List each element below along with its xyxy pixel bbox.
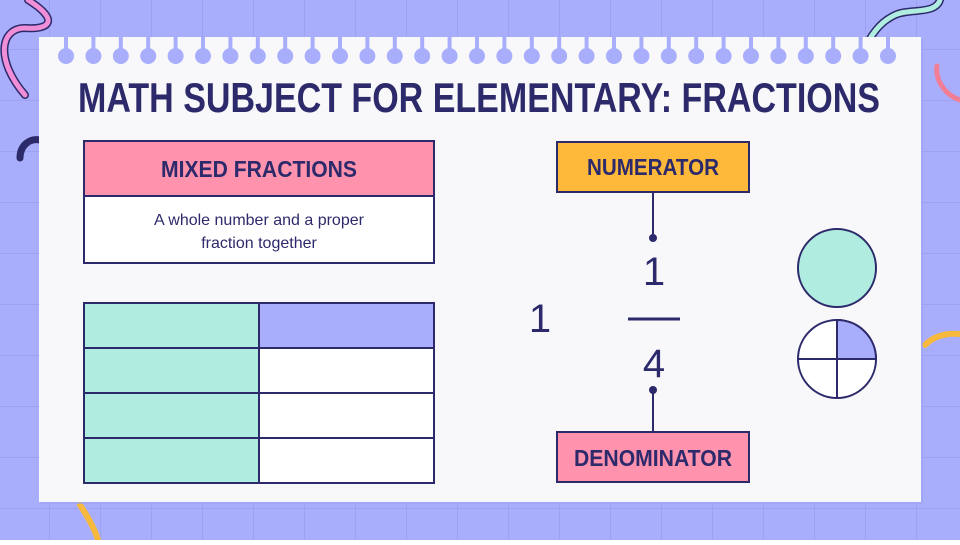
- decoration: orange arc bottom: [80, 505, 98, 540]
- panel: mixed fractions definition: A whole number and a proper: [154, 212, 365, 229]
- fraction 1 1/4: 1: [529, 297, 551, 341]
- fraction 1 1/4: [529, 250, 680, 386]
- connector denominator: [649, 386, 657, 432]
- denominator label: DENOMINATOR: [574, 445, 732, 471]
- denominator label: [557, 432, 749, 482]
- panel: mixed fractions definition: MIXED FRACTIONS: [161, 156, 357, 182]
- panel: mixed fractions definition: fraction together: [201, 235, 317, 252]
- decoration: pink squiggle: [4, 0, 48, 95]
- decoration: mint squiggle: [862, 0, 940, 55]
- panel: mixed fractions definition: [84, 141, 434, 263]
- numerator label: [557, 142, 749, 192]
- icon: whole circle: [798, 229, 876, 307]
- fraction 1 1/4: 4: [643, 342, 665, 386]
- decoration: orange arc right: [925, 334, 960, 345]
- icon: quartered circle: [798, 320, 876, 398]
- decoration: pink stroke right: [937, 66, 960, 100]
- paper: [39, 37, 923, 504]
- table: [84, 303, 434, 483]
- numerator label: NUMERATOR: [587, 154, 719, 180]
- decoration: navy hook: [20, 140, 40, 158]
- connector numerator: [649, 192, 657, 242]
- fraction 1 1/4: 1: [643, 250, 665, 294]
